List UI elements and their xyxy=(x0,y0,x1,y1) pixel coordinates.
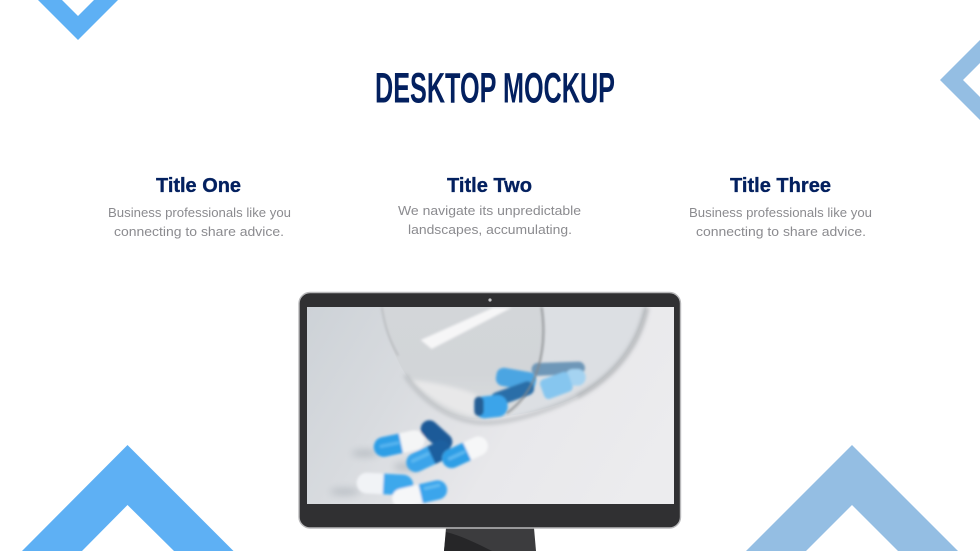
heading: title two: Title Two xyxy=(447,175,532,197)
heading: title three: Title Three xyxy=(730,175,831,197)
chevron: bottom right xyxy=(746,445,958,551)
screen photo: capsules spilling from a glass xyxy=(307,307,674,510)
monitor body xyxy=(299,292,680,528)
text: title two description: We navigate its unpredictable xyxy=(398,203,581,218)
text: title three description: Business professionals like you xyxy=(689,205,872,220)
capsule shadows xyxy=(330,450,420,495)
chevron: right edge xyxy=(940,40,980,120)
text: title one description: Business professionals like you xyxy=(108,205,291,220)
camera xyxy=(488,298,492,302)
text: title three description xyxy=(689,205,872,239)
title: DESKTOP MOCKUP xyxy=(375,64,615,112)
text: title three description: connecting to share advice. xyxy=(696,224,866,239)
glass rim xyxy=(507,307,543,413)
column: title three xyxy=(689,175,872,239)
capsules on the table xyxy=(356,417,491,510)
glass highlight xyxy=(421,308,512,349)
text: title two description: landscapes, accumulating. xyxy=(408,222,572,237)
chevron: bottom left xyxy=(22,445,234,551)
desktop monitor mockup xyxy=(299,292,680,551)
monitor stand xyxy=(444,528,536,551)
glass body and rim xyxy=(382,307,647,423)
column: title two xyxy=(398,175,581,237)
text: title two description xyxy=(398,203,581,237)
text: title one description: connecting to share advice. xyxy=(114,224,284,239)
heading: title one: Title One xyxy=(156,175,241,197)
chevron: top left xyxy=(38,0,118,40)
capsules in the glass xyxy=(473,361,586,419)
text: title one description xyxy=(108,205,291,239)
column: title one xyxy=(108,175,291,239)
